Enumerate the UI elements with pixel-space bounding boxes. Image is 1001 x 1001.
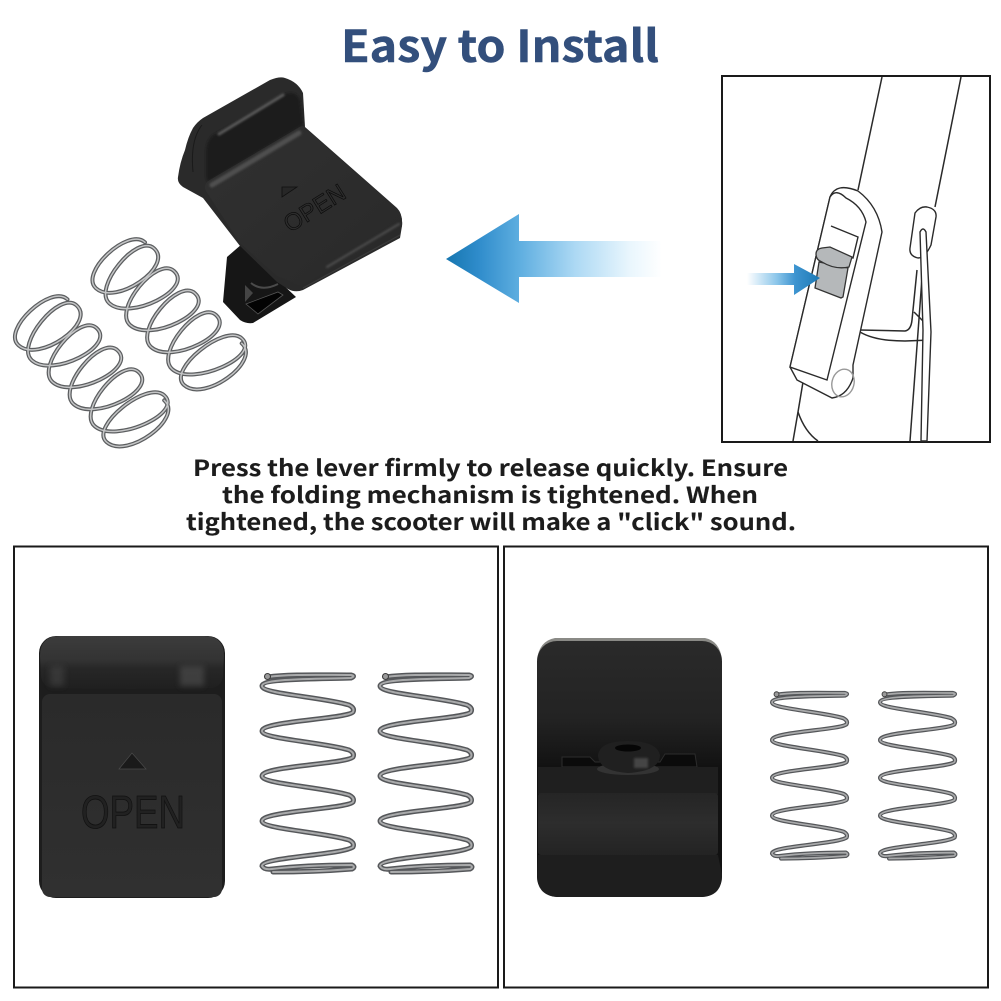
- lever: front face: [39, 636, 225, 898]
- lever: triangle mark: [282, 187, 297, 197]
- lever: OPEN label: OPEN: [81, 786, 185, 838]
- diagram: folding clamp: [790, 188, 882, 399]
- lever: rear face: [537, 638, 722, 897]
- diagram: scooter pole: [793, 77, 961, 441]
- arrow: small blue pointing right: [747, 264, 820, 295]
- spring: left: [772, 692, 847, 858]
- lever: mounting nut: [597, 741, 660, 775]
- spring: front angled: [15, 296, 168, 446]
- instruction text: [186, 451, 796, 537]
- arrow: large blue pointing left: [446, 214, 662, 303]
- spring: right: [880, 692, 955, 858]
- spring: rear angled: [92, 239, 246, 389]
- instruction text: the folding mechanism is tightened. When: [222, 478, 758, 510]
- panel: rear view: [504, 546, 988, 988]
- panel: installation diagram: [722, 76, 990, 442]
- spring: left: [262, 674, 354, 872]
- instruction text: tightened, the scooter will make a "click" sound.: [186, 505, 796, 537]
- diagram: grey lever: [815, 247, 852, 298]
- lever: body: [178, 77, 402, 291]
- product photo: lever and springs, angled view: [15, 77, 402, 446]
- spring: right: [380, 674, 472, 872]
- title: Easy to Install: [341, 11, 659, 75]
- instruction text: Press the lever firmly to release quickly. Ensure: [193, 451, 788, 483]
- lever: triangle mark: [119, 753, 146, 769]
- panel: front view: [14, 546, 498, 988]
- lever: OPEN label: OPEN: [279, 179, 351, 238]
- diagram: cable and guide: [910, 207, 936, 441]
- lever: under clip: [223, 244, 296, 323]
